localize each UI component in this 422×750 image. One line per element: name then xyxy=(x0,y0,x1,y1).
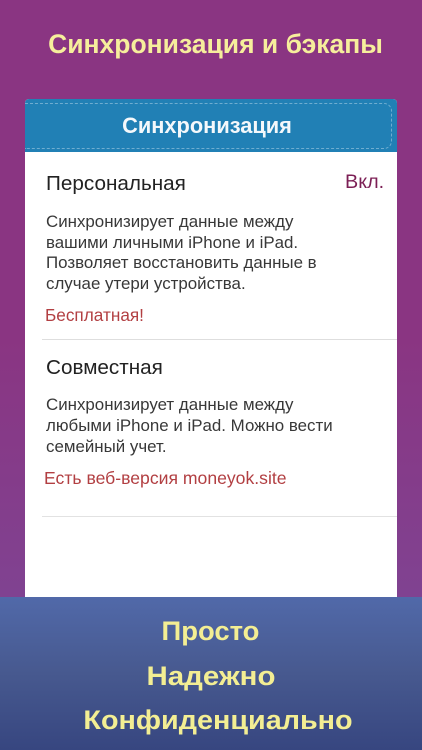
panel: sync settings xyxy=(25,99,397,598)
status: on: Вкл. xyxy=(345,171,384,193)
bottom banner xyxy=(0,597,422,750)
title: Синхронизация и бэкапы xyxy=(48,29,383,59)
text: personal description xyxy=(46,212,317,293)
text: personal description: случае утери устройства. xyxy=(46,274,246,293)
note: free: Бесплатная! xyxy=(45,305,144,325)
header title: Синхронизация xyxy=(122,113,292,138)
text: personal description: Синхронизирует данные между xyxy=(46,212,293,231)
note: web version: Есть веб-версия moneyok.site xyxy=(44,468,287,488)
text: personal description: вашими личными iPhone и iPad. xyxy=(46,233,298,252)
text: personal description: Позволяет восстановить данные в xyxy=(46,253,317,272)
heading: shared: Совместная xyxy=(46,356,163,379)
heading: personal: Персональная xyxy=(46,172,186,195)
banner line: confidential: Конфиденциально xyxy=(83,705,353,735)
divider xyxy=(42,516,397,517)
banner line: simple: Просто xyxy=(162,616,259,646)
text: shared description: любыми iPhone и iPad. Можно вести xyxy=(46,416,333,435)
header dashed outline xyxy=(25,103,392,149)
text: shared description xyxy=(46,395,333,456)
banner line: reliable: Надежно xyxy=(147,661,275,691)
panel header xyxy=(25,99,397,152)
divider xyxy=(42,339,397,340)
text: shared description: семейный учет. xyxy=(46,437,167,456)
text: shared description: Синхронизирует данные между xyxy=(46,395,293,414)
